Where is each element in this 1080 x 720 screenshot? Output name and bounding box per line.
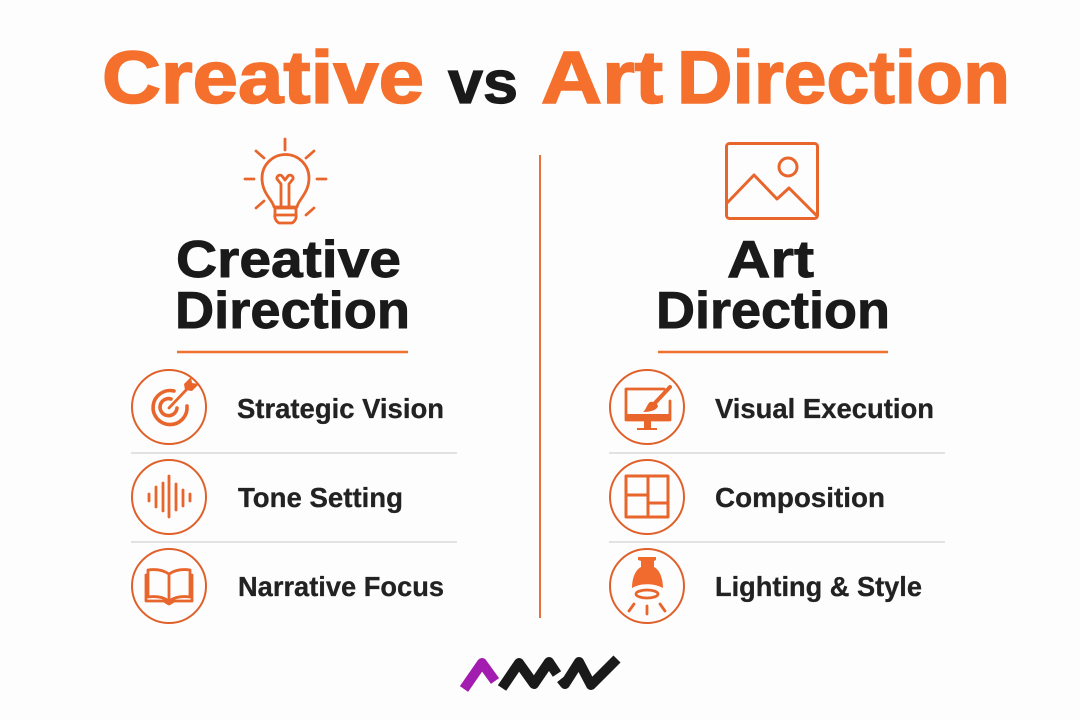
- title: [102, 36, 1010, 119]
- icon: monitor and brush: [610, 370, 684, 444]
- icon: ceiling lamp: [610, 549, 684, 623]
- item: composition: [610, 460, 885, 534]
- item: strategic vision: Strategic Vision: [237, 393, 444, 424]
- logo mark: purple peak: [464, 663, 495, 689]
- panel: creative direction: [131, 139, 457, 623]
- item: strategic vision: [132, 370, 444, 444]
- icon: open book: [132, 549, 206, 623]
- title: Direction: [677, 36, 1010, 119]
- item: visual execution: [610, 370, 934, 444]
- icon: sound wave: [132, 460, 206, 534]
- heading underline: [658, 351, 888, 353]
- title: vs: [448, 49, 518, 116]
- icon: layout grid: [610, 460, 684, 534]
- heading: art direction: Art: [727, 231, 814, 289]
- title: Creative: [102, 36, 424, 119]
- heading: creative direction: [175, 231, 410, 340]
- heading: art direction: Direction: [656, 282, 890, 340]
- item: lighting and style: Lighting & Style: [715, 571, 922, 602]
- item: narrative focus: Narrative Focus: [238, 571, 444, 602]
- title: Art: [541, 36, 663, 119]
- icon: image landscape: [726, 144, 818, 218]
- item: composition: Composition: [715, 482, 885, 513]
- panel: art direction: [609, 144, 945, 623]
- center divider: [539, 155, 541, 618]
- icon: light bulb: [245, 139, 326, 223]
- heading: art direction: [656, 231, 890, 340]
- item: narrative focus: [132, 549, 444, 623]
- logo mark: black waves: [502, 659, 617, 688]
- heading: creative direction: Creative: [176, 231, 401, 289]
- item: lighting and style: [610, 549, 922, 623]
- logo: [464, 659, 617, 689]
- item: tone setting: Tone Setting: [238, 482, 403, 513]
- item: tone setting: [132, 460, 403, 534]
- heading underline: [177, 351, 408, 353]
- item: visual execution: Visual Execution: [715, 393, 934, 424]
- heading: creative direction: Direction: [175, 282, 410, 340]
- icon: target: [132, 370, 206, 444]
